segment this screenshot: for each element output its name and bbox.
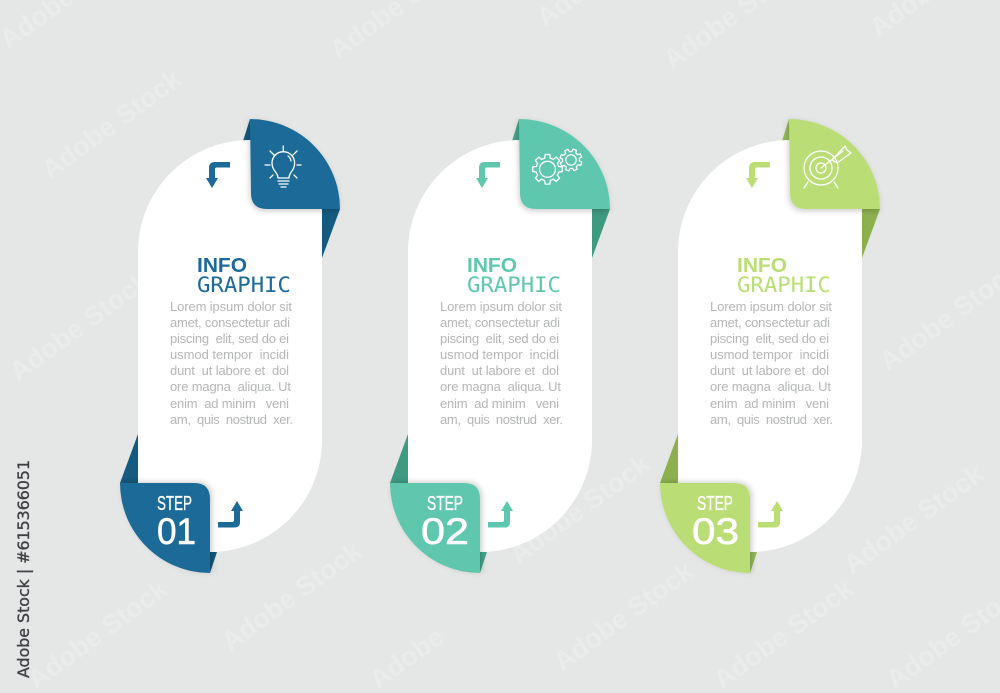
body text: am, quis nostrud xer.	[170, 412, 293, 427]
body text: enim ad minim veni	[170, 396, 289, 411]
step label: 02	[421, 511, 469, 552]
panel: step 01	[120, 119, 340, 573]
body text: ore magna aliqua. Ut	[170, 379, 291, 394]
body text: piscing elit, sed do ei	[170, 331, 289, 346]
fold: right	[322, 209, 340, 258]
heading	[197, 255, 291, 297]
heading: INFO	[197, 255, 247, 277]
body text: usmod tempor incidi	[170, 347, 289, 362]
watermark pattern: Adobe Stock	[838, 458, 990, 580]
watermark pattern: Adobe Stock	[216, 535, 368, 657]
arrow: up right	[488, 501, 513, 528]
body text: dunt ut labore et dol	[170, 363, 289, 378]
heading: GRAPHIC	[467, 273, 561, 297]
watermark pattern: Adobe Stock	[36, 63, 188, 185]
fold: top left	[512, 119, 520, 141]
body text: dunt ut labore et dol	[440, 363, 559, 378]
top tab	[789, 119, 880, 209]
watermark pattern: Adobe	[364, 621, 449, 693]
icon: gears	[533, 146, 585, 184]
body text: piscing elit, sed do ei	[440, 331, 559, 346]
bottom tab	[660, 483, 750, 573]
body text: Lorem ipsum dolor sit	[440, 299, 562, 314]
arrow: up right	[758, 501, 783, 528]
watermark pattern: Adobe Stock	[548, 555, 700, 677]
step label	[421, 493, 469, 552]
top tab	[519, 119, 610, 209]
body text: piscing elit, sed do ei	[710, 331, 829, 346]
watermark pattern: Adobe Stock	[504, 448, 656, 570]
body text: ore magna aliqua. Ut	[710, 379, 831, 394]
body text: amet, consectetur adi	[170, 315, 290, 330]
fold: lower left	[660, 434, 678, 483]
body text	[710, 299, 833, 427]
fold: lower left	[390, 434, 408, 483]
step label: 03	[692, 511, 739, 552]
top tab	[250, 119, 340, 209]
fold: right	[592, 209, 610, 258]
watermark pattern: Adobe Stock	[22, 573, 174, 693]
step label: 01	[157, 511, 196, 552]
icon: light bulb	[265, 146, 301, 187]
fold: bottom	[480, 552, 487, 573]
step label: STEP	[427, 493, 463, 515]
heading: INFO	[737, 255, 787, 277]
panel: step 02	[390, 119, 610, 573]
fold: right	[862, 209, 880, 258]
fold: bottom	[210, 552, 217, 573]
fold: lower left	[120, 434, 138, 483]
bottom tab	[390, 483, 480, 573]
body text: usmod tempor incidi	[440, 347, 559, 362]
arrow: down left	[206, 162, 230, 188]
bottom tab	[120, 483, 210, 573]
step label: STEP	[157, 493, 192, 515]
fold: bottom	[750, 552, 757, 573]
body text: enim ad minim veni	[710, 396, 829, 411]
icon: target	[804, 146, 851, 188]
body text: Lorem ipsum dolor sit	[170, 299, 292, 314]
body text	[440, 299, 563, 427]
arrow: down left	[476, 162, 500, 188]
watermark pattern: Adobe Stock	[708, 573, 860, 693]
heading: INFO	[467, 255, 517, 277]
stock id label: Adobe Stock | #615366051	[14, 460, 33, 678]
panel: step 03	[660, 119, 880, 573]
step label	[157, 493, 196, 552]
step label: STEP	[697, 493, 733, 515]
fold: top left	[243, 119, 251, 141]
body text	[170, 299, 293, 427]
step label	[692, 493, 739, 552]
body text: enim ad minim veni	[440, 396, 559, 411]
card body	[138, 140, 322, 552]
arrow: up right	[218, 501, 243, 528]
heading	[467, 255, 561, 297]
body text: am, quis nostrud xer.	[710, 412, 833, 427]
body text: amet, consectetur adi	[440, 315, 560, 330]
body text: dunt ut labore et dol	[710, 363, 829, 378]
heading	[737, 255, 831, 297]
body text: amet, consectetur adi	[710, 315, 830, 330]
arrow: down left	[746, 162, 770, 188]
watermark pattern: Adobe Stock	[4, 265, 156, 387]
body text: Lorem ipsum dolor sit	[710, 299, 832, 314]
fold: top left	[782, 119, 790, 141]
body text: usmod tempor incidi	[710, 347, 829, 362]
heading: GRAPHIC	[737, 273, 831, 297]
heading: GRAPHIC	[197, 273, 291, 297]
card body	[408, 140, 592, 552]
body text: ore magna aliqua. Ut	[440, 379, 561, 394]
card body	[678, 140, 862, 552]
body text: am, quis nostrud xer.	[440, 412, 563, 427]
